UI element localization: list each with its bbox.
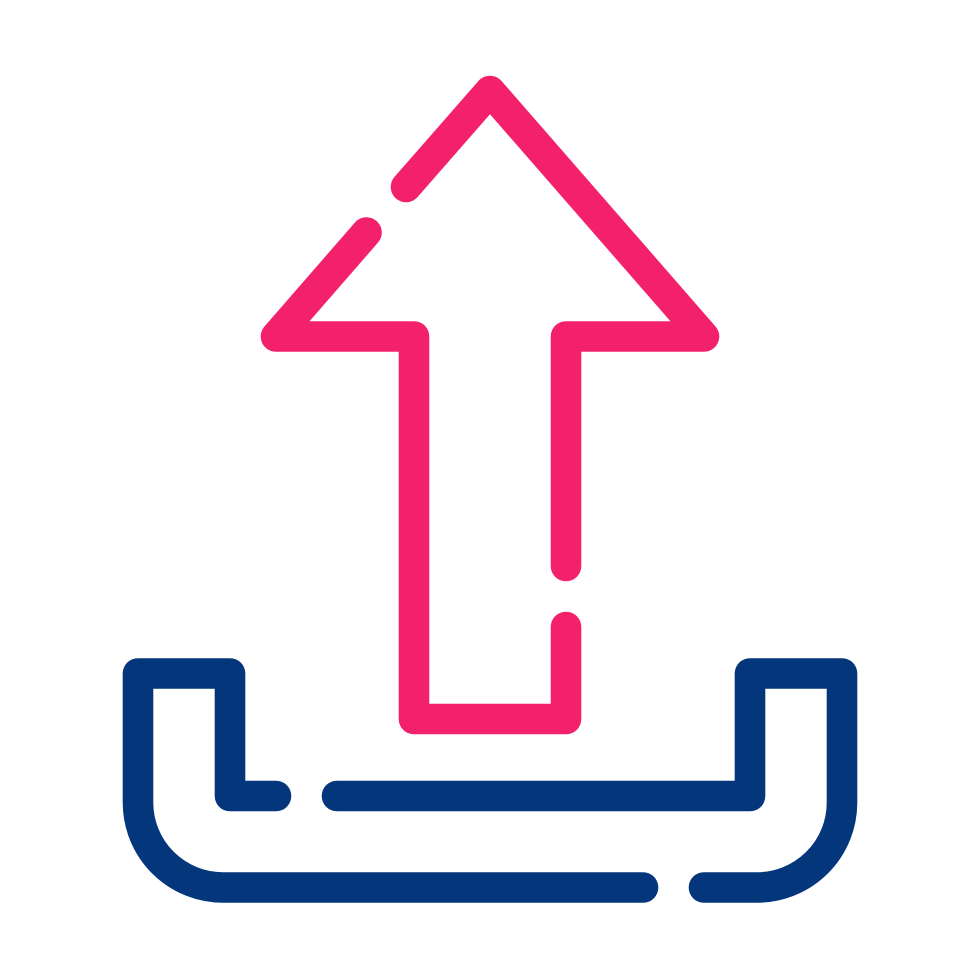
icon: pink upward arrow — [276, 91, 704, 719]
icon: navy tray — [138, 674, 842, 888]
